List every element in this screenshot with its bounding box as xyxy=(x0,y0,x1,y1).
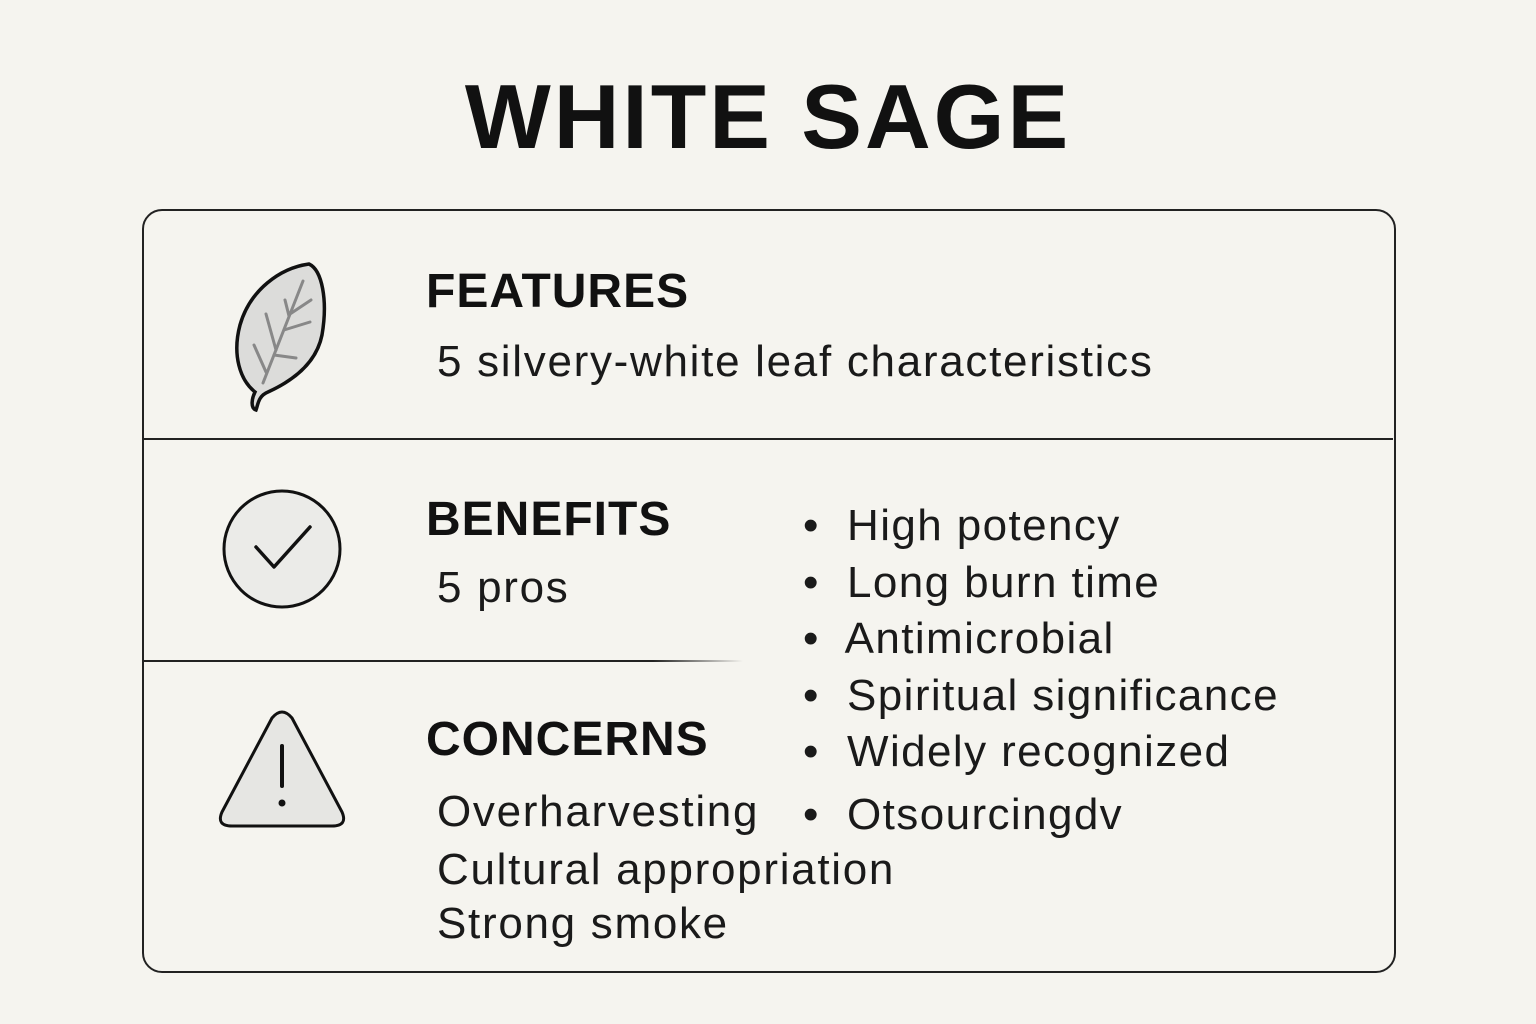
panel: main card xyxy=(142,209,1396,973)
list: concerns: Strong smoke xyxy=(437,899,729,948)
heading: concerns: CONCERNS xyxy=(426,713,709,766)
text: benefits sub: 5 pros xyxy=(437,563,570,612)
title: WHITE SAGE xyxy=(465,67,1071,168)
list: benefits bullets: • Spiritual significance xyxy=(803,670,1279,720)
list: benefits bullets: • High potency xyxy=(803,501,1121,550)
list: concerns: Cultural appropriation xyxy=(437,845,895,894)
icon: leaf xyxy=(235,262,326,412)
list: benefits bullets: • Otsourcingdv xyxy=(803,790,1123,838)
list: concerns xyxy=(437,787,895,948)
list: benefits bullets: • Long burn time xyxy=(803,558,1160,606)
list: benefits bullets xyxy=(803,501,1279,838)
text: features sub: 5 silvery-white leaf characteristics xyxy=(437,337,1154,386)
heading: benefits: BENEFITS xyxy=(426,493,671,546)
list: benefits bullets: • Widely recognized xyxy=(803,727,1230,776)
heading: features: FEATURES xyxy=(426,265,689,318)
list: concerns: Overharvesting xyxy=(437,787,759,836)
icon: check circle xyxy=(222,490,342,608)
icon: warning triangle xyxy=(218,710,346,828)
list: benefits bullets: • Antimicrobial xyxy=(803,614,1115,663)
